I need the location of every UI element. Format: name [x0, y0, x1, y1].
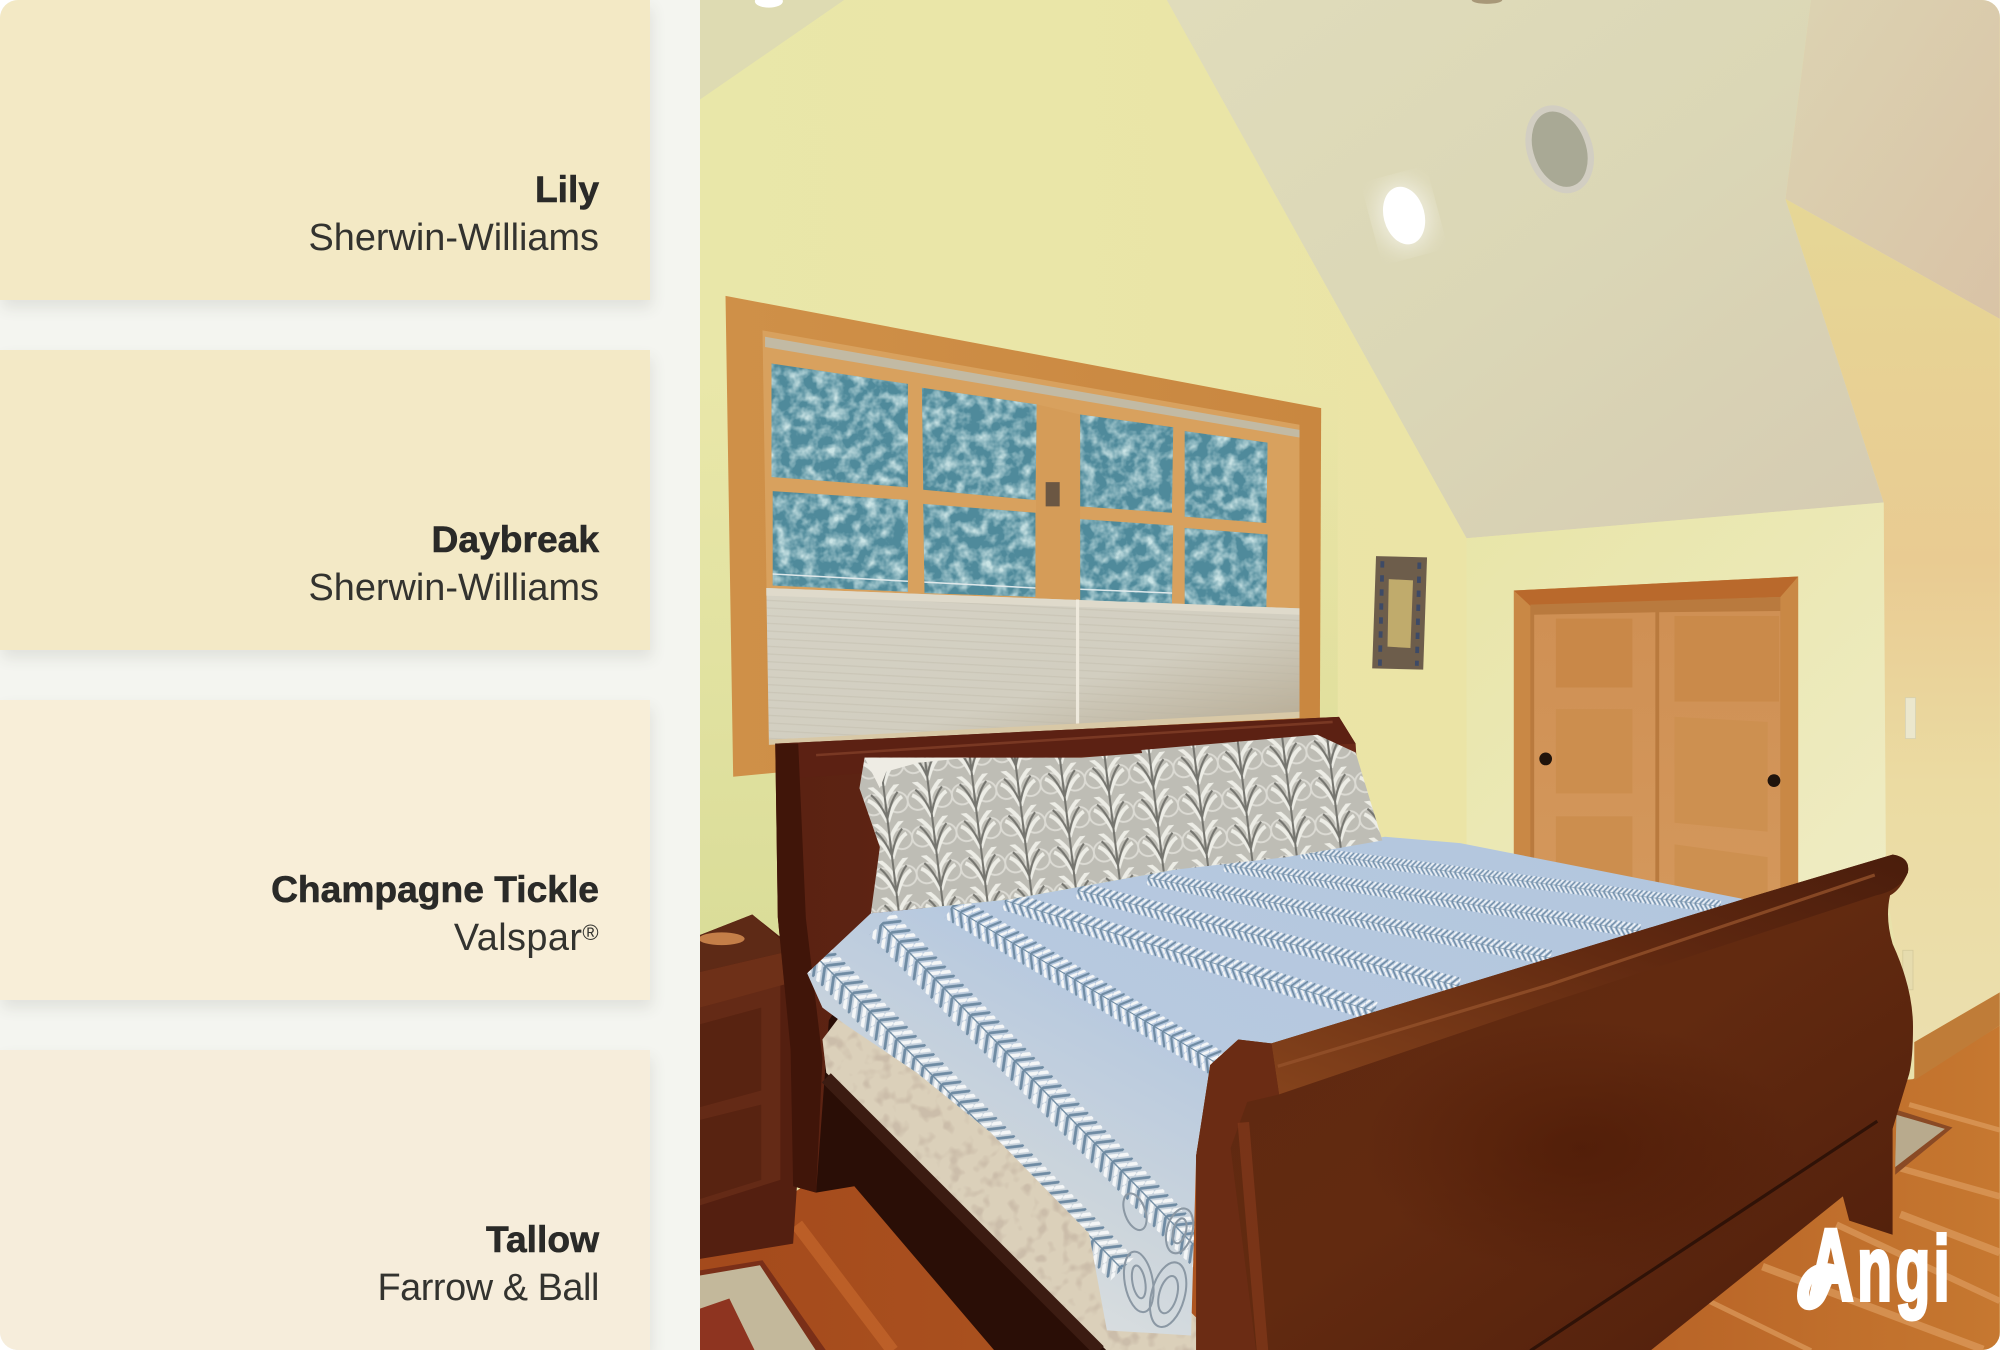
right rug: [1895, 1110, 1953, 1175]
baseboard: [1914, 992, 2000, 1080]
comforter: [807, 837, 1745, 1335]
swatch name: Lily: Lily: [535, 168, 599, 210]
sloped ceiling: [1167, 0, 1884, 538]
floor: [700, 1026, 2000, 1350]
tree view through panes: [765, 357, 1275, 612]
swatch brand: Sherwin-Williams: Sherwin-Williams: [308, 217, 599, 259]
comforter feather rows: [816, 852, 1720, 1331]
nightstand: [699, 915, 797, 1259]
left pillow: [859, 753, 1173, 913]
swatch name: Tallow: Tallow: [486, 1218, 599, 1260]
swatch brand: Valspar: Valspar®: [454, 917, 599, 959]
window latch: [1046, 482, 1060, 506]
swatch name: Champagne Tickle: Champagne Tickle: [271, 868, 599, 910]
headboard top rail: [775, 717, 1356, 778]
wall mirror: [1372, 556, 1427, 670]
swatch card: Daybreak: [0, 350, 650, 650]
swatch name: Daybreak: Daybreak: [432, 518, 599, 560]
ceiling corner with lamp: [700, 0, 844, 99]
ceiling fan base: [1472, 0, 1502, 4]
swatch card: Lily: [0, 0, 650, 300]
headboard post: [775, 744, 822, 1193]
headboard: [775, 717, 1357, 1193]
left rug: [700, 1260, 826, 1350]
footboard top rail: [1271, 855, 1908, 1094]
left door: [1534, 612, 1655, 912]
logo wordmark: Angi: [1808, 1207, 1953, 1322]
recessed light: [1368, 174, 1440, 257]
swatch brand: Sherwin-Williams: Sherwin-Williams: [308, 567, 599, 609]
window centre mullion: [1035, 404, 1080, 602]
main back wall: [700, 0, 2000, 1350]
blind head rail: [765, 337, 1299, 438]
swatch card: Champagne Tickle: [0, 700, 650, 1000]
footboard: [1196, 855, 1913, 1350]
alcove wall: [1467, 503, 1886, 918]
light switch: [1905, 698, 1916, 739]
lower rail seam: [1530, 1121, 1877, 1350]
wall outlet: [1903, 950, 1913, 990]
right door: [1659, 611, 1780, 931]
closet doors: [1514, 577, 1798, 931]
right side wall: [1785, 199, 2000, 1059]
swatch card: Tallow: [0, 1050, 650, 1350]
cellular shade: [766, 588, 1299, 745]
window sash: [762, 330, 1299, 742]
mottled box spring: [816, 1008, 1211, 1350]
under-bed shadow: [797, 969, 1122, 1350]
footboard panel: [1196, 855, 1913, 1350]
comforter swirl motifs: [1122, 1192, 1194, 1328]
swatch brand: Farrow & Ball: Farrow & Ball: [377, 1267, 599, 1309]
right pillow: [1141, 735, 1382, 870]
window: [726, 296, 1321, 777]
logo swash on the A: [1803, 1269, 1838, 1304]
bedroom photo illustration: [700, 0, 2000, 1350]
footboard scroll post: [1196, 1040, 1279, 1350]
right ceiling plane: [1785, 0, 2000, 319]
bed frame rail: [826, 1078, 1099, 1350]
window trim: [726, 296, 1321, 777]
ceiling speaker: [1518, 100, 1602, 199]
pillows: [859, 735, 1382, 913]
